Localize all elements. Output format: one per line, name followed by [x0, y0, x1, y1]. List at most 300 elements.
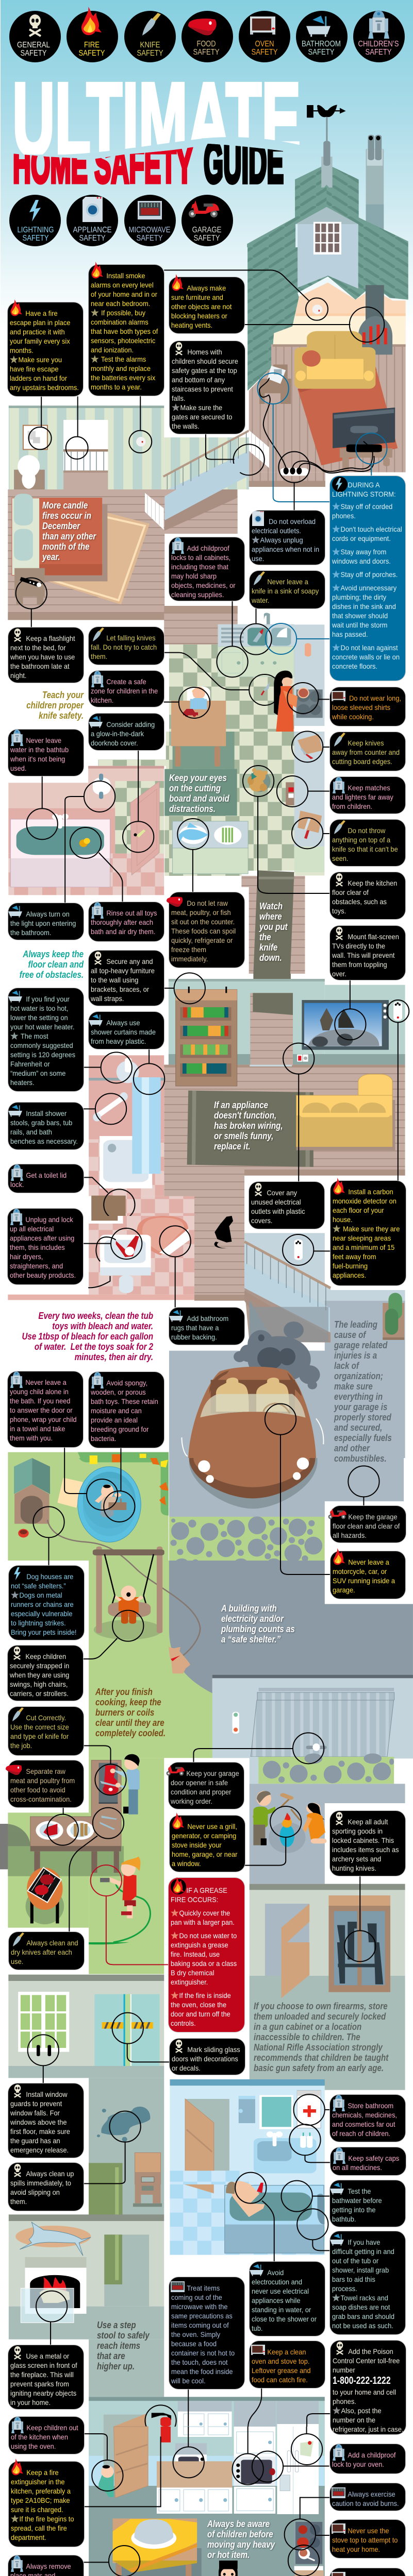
callout: Keep all adult sporting goods: Keep all adult: [348, 1818, 388, 1826]
illustration: girl with hose: [100, 1856, 150, 1942]
callout: Use a metal or glass screen: igniting nearby objects: [10, 2389, 76, 2397]
illustration: sink counter: [218, 613, 294, 676]
callout: Store bathroom chemicals: of reach of children.: [332, 2129, 390, 2138]
callout: Have a fire escape plan: [8, 302, 83, 396]
illustration: fireplace: [21, 2257, 87, 2323]
callout: Mark sliding glass doors: or decals.: [172, 2064, 201, 2072]
caption: Keep your eyes: Keep your eyes: [169, 773, 227, 783]
callout circles: [36, 2173, 328, 2436]
callout: Mark sliding glass doors: [170, 2039, 245, 2075]
caption: Use a step stool: Use a step: [97, 2320, 136, 2330]
caption: If an appliance: If an appliance: [214, 1100, 268, 1110]
illustration: door and child: [98, 2427, 148, 2498]
callout: Use a metal or glass screen: the fireplace. This will: [10, 2370, 74, 2379]
connectors: [48, 1458, 364, 1659]
caption: A building with electricity: A building with: [221, 1603, 277, 1614]
callout: Do not wear long: Do not wear long,: [349, 694, 401, 702]
callout: Add a childproof lock to oven: Add a childproof: [348, 2451, 395, 2459]
callout: Treat items from the microwave: the touch, does not: [171, 2358, 228, 2366]
callout: Install window guards: window falls. For: [10, 2109, 60, 2117]
callout: Add a childproof lock to oven: [330, 2444, 405, 2473]
panel: during a lightning storm: [330, 476, 405, 681]
callout: Cover unused outlets: Cover any: [267, 1189, 297, 1197]
callout: Add bathroom rugs: Add bathroom: [187, 1314, 228, 1323]
callout: Do not throw: [330, 820, 405, 866]
illustration: refrigerator: [277, 2427, 319, 2514]
callout: Keep a fire extinguisher: department.: [11, 2533, 46, 2541]
callout: Install window guards: first floor, make sure: [10, 2127, 70, 2136]
callout: Test the bathwater: bathwater before: [332, 2196, 382, 2205]
callout: Install smoke alarms: [89, 265, 164, 396]
illustration: rug: [298, 366, 398, 465]
callout: Keep all adult sporting goods: archery sets and: [332, 1855, 381, 1863]
callout: Do not wear long: while cooking.: [332, 713, 374, 721]
connectors: [51, 2196, 331, 2427]
caption: Always be aware of children: moving any heavy: [207, 2539, 275, 2550]
callout circles: [28, 1930, 375, 2155]
callout: Store bathroom chemicals: [330, 2095, 405, 2142]
callout: Get a toilet lid lock: lock.: [10, 1180, 24, 1189]
panel: during a lightning storm: has passed.: [332, 630, 368, 638]
panel: during a lightning storm: phones.: [332, 512, 356, 520]
callout: Keep a clean oven: Leftover grease and: [252, 2366, 311, 2375]
callout: Treat items from the microwave: container is not hot to: [171, 2349, 235, 2357]
callout: Keep a fire extinguisher: Keep a fire: [26, 2468, 59, 2477]
caption: Use a step stool: reach items: [97, 2341, 140, 2351]
callout: Keep a fire extinguisher: type 2A10BC; make: [11, 2496, 70, 2504]
callout: Homes with children: children should secure: [172, 357, 238, 365]
callout: Dog houses: especially vulnerable: [11, 1609, 73, 1618]
callout: Do not let raw meat: Do not let raw: [187, 899, 228, 907]
illustration: dark runner and wood: [241, 870, 305, 974]
illustration: upper yard: [8, 1452, 169, 1458]
callout: Install window guards: guards to prevent: [10, 2099, 62, 2108]
callout: Install a carbon monoxide detector: and a minimum of 15: [333, 1243, 394, 1251]
panel: if a grease fire occurs: If the fire is inside: [179, 1991, 231, 1999]
callout: Rinse out toys: bath and air dry them.: [91, 927, 155, 936]
callout: Keep your garage door opener: working order.: [171, 1797, 212, 1805]
callout: Keep a fire extinguisher: If the fire begins to: [20, 2515, 74, 2523]
caption: More candle fires: December: [42, 521, 80, 531]
callout: Always make sure furniture: other objects are not: [171, 302, 232, 311]
callout: Keep the kitchen floor: obstacles, such as: [332, 897, 387, 906]
callout: Install window guards: the guard has an: [10, 2137, 60, 2145]
badge: lightning safety: SAFETY: [23, 234, 49, 243]
panel: if a grease fire occurs: IF A GREASE: [186, 1886, 227, 1894]
callout: Never use the stove top: stove top to attempt to: [332, 2536, 398, 2544]
caption: The leading cause: properly stored: [334, 1412, 391, 1422]
callout: Treat items from the microwave: coming out of the: [171, 2293, 222, 2301]
callout: Mount flat-screen: them from toppling: [332, 960, 387, 969]
callout: Keep matches: [330, 777, 405, 814]
panel: if a grease fire occurs: [169, 1878, 244, 2032]
callout: Always make sure furniture: Always make: [187, 284, 226, 292]
caption: More candle fires: [42, 500, 97, 564]
callout: Keep children out of the kitchen: of the kitchen when: [11, 2433, 68, 2441]
callout: Keep the kitchen floor: [330, 872, 405, 919]
illustration: plant: [383, 1293, 404, 1340]
illustration: staircase: [244, 1242, 331, 1343]
callout: Install shower stools: [8, 1103, 84, 1149]
illustration: picnic table: [30, 1760, 121, 1873]
badge: oven safety: SAFETY: [252, 48, 278, 57]
callout: If you have difficulty getting in: Towel racks and: [341, 2294, 388, 2302]
illustration: blue bathroom: [170, 2079, 325, 2184]
callout: Always make sure furniture: [169, 277, 244, 333]
callout: If you have difficulty getting in: soap dishes are not: [332, 2303, 390, 2311]
caption: Teach your children: children proper: [26, 700, 84, 710]
callout: Homes with children: gates are secured to: [172, 413, 232, 421]
callout: Always turn on the light: the bathroom.: [10, 928, 51, 937]
illustration: kitchen floor: [169, 645, 294, 732]
caption: If you choose to own firearms: If you choose to own firearms, store: [254, 2001, 388, 2011]
illustration: second bathroom: [89, 1055, 194, 1216]
callout: Do not let raw meat: freeze them: [171, 945, 206, 954]
callout: Create a safe zone: [89, 671, 164, 707]
callout: Test the bathwater: getting into the: [332, 2206, 376, 2214]
callout: Unplug and lock up appliances: Unplug and lock: [25, 1215, 73, 1224]
callout: If you find your hot water: heaters.: [10, 1078, 35, 1087]
callout: If you have difficulty getting in: process.: [332, 2284, 357, 2293]
callout: Add the Poison Control Center number: number on the: [333, 2416, 375, 2424]
callout: Store bathroom chemicals: Store bathroom: [348, 2102, 393, 2110]
callout: Get a toilet lid lock: [8, 1164, 84, 1193]
callout: Store bathroom chemicals: chemicals, medicines,: [332, 2111, 397, 2119]
illustration: right counter: [294, 624, 324, 726]
callout: Install a carbon monoxide detector: house.: [333, 1215, 353, 1224]
caption: If an appliance: replace it.: [214, 1141, 251, 1151]
caption: Watch where you put the knife down: the: [259, 932, 271, 942]
panel: during a lightning storm: plumbing; the dirty: [332, 593, 386, 601]
caption: The leading cause: everything in: [334, 1392, 383, 1402]
callout: Avoid spongy bath toys: Avoid spongy,: [106, 1379, 147, 1387]
panel: if a grease fire occurs: Quickly cover the: [179, 1909, 230, 1917]
callout: Consider adding: doorknob cover.: [91, 739, 138, 747]
callout: Keep matches: and lighters far away: [332, 793, 393, 801]
callout: If you find your hot water: your hot water heater.: [10, 1023, 75, 1031]
illustration: car rear: [189, 1458, 318, 1509]
caption: Watch where you put the knife down: [259, 901, 289, 963]
caption: Always keep the floor clean: free of obstacles.: [20, 970, 84, 980]
callout: Rinse out toys: [89, 902, 164, 941]
callout: Have a fire escape plan: Have a fire: [25, 309, 58, 317]
callout: Always clean and dry knives: [9, 1932, 84, 1970]
caption: Keep your eyes: on the cutting: [169, 783, 221, 793]
callout: Unplug and lock up appliances: straighteners, and: [10, 1262, 63, 1270]
caption: After you finish cooking: cooking, keep the: [95, 1697, 161, 1707]
callout: Cover unused outlets: [249, 1182, 324, 1229]
callout: Always use shower curtains: [89, 1012, 164, 1049]
callout: Dog houses: Bring your pets inside!: [11, 1628, 76, 1636]
panel: during a lightning storm: windows and doors.: [332, 557, 391, 565]
callout: Keep a fire extinguisher: kitchen, preferably a: [11, 2487, 71, 2495]
callout: Avoid spongy bath toys: moisture and can: [91, 1406, 142, 1415]
callout: Keep your garage door opener: condition and proper: [171, 1788, 231, 1796]
callout circles: [33, 1466, 379, 1641]
callout: Get a toilet lid lock: Get a toilet lid: [26, 1171, 67, 1179]
scene: bedroom and kitchen: [8, 464, 330, 732]
panel: during a lightning storm: LIGHTNING STORM:: [332, 490, 396, 498]
callout: Use a metal or glass screen: in your home.: [10, 2398, 51, 2406]
illustration: nightstand and flashlight: [14, 568, 45, 604]
illustration: dish counter: [173, 821, 248, 874]
panel: if a grease fire occurs: the oven, close the: [171, 2001, 226, 2009]
callout: Never leave water: water in the bathtub: [10, 745, 69, 754]
callout: Keep a flashlight: Keep a flashlight: [26, 634, 75, 642]
callout: Keep children out of the kitchen: [9, 2417, 84, 2454]
callout: If you find your hot water: If you find your: [26, 995, 70, 1003]
title: Ultimate Home Safety Guide: HOME SAFETY: [13, 136, 193, 194]
illustration: dog: [169, 1647, 190, 1673]
badge: oven safety: [239, 11, 290, 62]
caption: After you finish cooking: burners or coils: [95, 1707, 154, 1718]
callout: Always exercise caution: [330, 2483, 405, 2511]
callout: Treat items from the microwave: items coming out of: [171, 2321, 229, 2329]
callout: Have a fire escape plan: ladders on hand for: [10, 374, 67, 382]
badge: lightning safety: [9, 195, 61, 246]
illustration: stairs: [163, 431, 249, 491]
callout: Dog houses: not “safe shelters.”: [11, 1582, 66, 1590]
caption: The leading cause: injuries is a: [334, 1350, 377, 1361]
panel: if a grease fire occurs: door and turn off the: [171, 2010, 230, 2018]
caption: Teach your children: Teach your: [42, 690, 84, 700]
callout: Never leave a motorcycle running: motorcycle, car, or: [333, 1567, 387, 1575]
callout: Install a carbon monoxide detector: monoxide detector on: [333, 1197, 397, 1205]
illustration: black cat: [214, 1216, 233, 1248]
caption: The leading cause: organization;: [334, 1371, 383, 1381]
callout: Keep a fire extinguisher: sure it is charged.: [11, 2505, 63, 2514]
callout: Never leave a young child: phone, wrap your child: [10, 1415, 77, 1423]
illustration: doorway: [250, 993, 293, 1066]
callout: If you find your hot water: Fahrenheit or: [10, 1060, 50, 1068]
callout: Homes with children: the walls.: [172, 422, 200, 430]
illustration: child at table: [171, 687, 226, 732]
illustration: kitchen upper wall: [89, 2397, 325, 2427]
callout: Keep a fire extinguisher: [9, 2462, 84, 2547]
callout: Install smoke alarms: alarms on every level: [91, 281, 154, 289]
illustration: towel: [57, 1478, 83, 1508]
callout: Use a metal or glass screen: prevent sparks from: [10, 2380, 69, 2388]
illustration: sliding glass door: [94, 1994, 160, 2066]
callout: Treat items from the microwave: because a food: [171, 2340, 217, 2348]
caption: If an appliance: doesn't function,: [214, 1110, 276, 1121]
callout: Keep a flashlight: [8, 628, 84, 683]
badge: food safety: SAFETY: [193, 48, 220, 57]
callout: Always use shower curtains: Always use: [106, 1019, 140, 1027]
callout: Secure any furniture: wall straps.: [91, 994, 124, 1003]
callout: Add childproof locks: objects, medicines, or: [171, 581, 236, 589]
callout: Avoid electrocution: close to the shower or: [252, 2315, 317, 2323]
callout: Secure any furniture: all top-heavy furniture: [91, 967, 155, 975]
callout: Always turn on the light: [8, 903, 84, 940]
callout: Let falling knives: fall. Do not try to catch: [91, 643, 157, 651]
callout: Add childproof locks: cleaning supplies.: [171, 590, 224, 599]
callout: Consider adding: Consider adding: [106, 720, 155, 728]
callout: Install a carbon monoxide detector: appliances.: [333, 1271, 366, 1279]
illustration: sofa: [294, 331, 375, 389]
callout: Cut Correctly: Use the correct size: [10, 1723, 69, 1731]
callout: Test the bathwater: [330, 2180, 405, 2227]
callout: Mount flat-screen: TVs directly to the: [332, 942, 385, 950]
callout: If you have difficulty getting in: out of the tub or: [332, 2257, 378, 2265]
illustration: house lower wall: [8, 1975, 164, 2184]
callout: Never leave a knife: [250, 571, 325, 608]
badge: microwave safety: [124, 195, 176, 246]
callout: Keep the kitchen floor: Keep the kitchen: [348, 879, 397, 887]
callout: Keep matches: Keep matches: [348, 784, 390, 792]
callout: Always clean and dry knives: use.: [11, 1957, 23, 1965]
callout circles: [29, 298, 387, 483]
callout: Separate raw meat: meat and poultry from: [10, 1776, 75, 1785]
callout: Do not overload: electrical outlets.: [252, 527, 301, 535]
callout: Do not wear long: loose sleeved shirts: [332, 703, 390, 711]
callout: Use a metal or glass screen: glass screen in front of: [10, 2361, 77, 2369]
illustration: girl: [214, 2561, 240, 2576]
callout: Never leave a young child: [8, 1371, 83, 1447]
caption: The leading cause: [334, 1319, 392, 1464]
connectors: [41, 270, 371, 489]
callout: If you have difficulty getting in: grab bars and should: [332, 2312, 394, 2320]
caption: Every two weeks: Use 1tbsp of bleach for each gallon: [22, 1331, 153, 1342]
caption: The leading cause: garage related: [334, 1340, 387, 1350]
panel: during a lightning storm: cords or equipment.: [332, 534, 391, 543]
illustration: smoke detector: [294, 1240, 303, 1260]
badge: general safety: GENERAL: [17, 41, 50, 49]
callout: Add childproof locks: [169, 537, 244, 601]
caption: The leading cause: your garage is: [334, 1402, 387, 1412]
callout: Avoid electrocution: tub.: [252, 2324, 262, 2332]
callout: Keep a flashlight: next to the bed, for: [10, 643, 65, 652]
caption: Every two weeks: [22, 1311, 153, 1362]
illustration: stairs lower: [145, 464, 249, 531]
callout: Have a fire escape plan: and practice it with: [10, 328, 65, 336]
panel: if a grease fire occurs: baking soda or a class: [171, 1959, 237, 1968]
panel: if a grease fire occurs: FIRE OCCURS:: [171, 1895, 218, 1904]
caption: Always keep the floor clean: [20, 949, 84, 980]
illustration: power strip and cords: [259, 378, 374, 476]
callout: Cut Correctly: Cut Correctly.: [26, 1714, 66, 1722]
caption: A building with electricity: plumbing counts as: [221, 1624, 295, 1634]
illustration: phone on table: [259, 364, 291, 404]
caption: Use a step stool: [97, 2320, 150, 2371]
illustration: teddy bear: [247, 768, 271, 792]
callout: Install smoke alarms: of your home and in or: [91, 290, 157, 298]
callout: Treat items from the microwave: Treat items: [187, 2284, 220, 2292]
illustration: patio: [250, 1784, 405, 1884]
callout: Let falling knives: Let falling knives: [106, 634, 156, 642]
callout: Treat items from the microwave: the oven. Simply: [171, 2330, 220, 2338]
callout: If you find your hot water: commonly suggested: [10, 1041, 73, 1049]
scene: kitchen lower and night-light bathroom: [84, 2427, 406, 2576]
callout: Keep the kitchen floor: floor clear of: [332, 888, 369, 896]
callout: Avoid spongy bath toys: bath toys. These retain: [91, 1397, 158, 1405]
callout: Add childproof locks: including those that: [171, 563, 228, 571]
badge: appliance safety: SAFETY: [79, 234, 106, 243]
callout: Add the Poison Control Center number: Also, post the: [341, 2406, 382, 2415]
callout: Install a carbon monoxide detector: [331, 1181, 406, 1285]
callout: Install smoke alarms: that have both types of: [91, 327, 158, 335]
caption: If you choose to own firearms: recommends that children be taught: [254, 2053, 388, 2063]
caption: If you choose to own firearms: [254, 2001, 389, 2073]
illustration: baby gate: [249, 430, 269, 468]
callout: If you find your hot water: [8, 988, 84, 1091]
callout: Test the bathwater: bathtub.: [332, 2215, 356, 2223]
caption: If an appliance: or smells funny,: [214, 1131, 273, 1141]
scene: garage door, barbecue and campfire: [0, 1700, 413, 1942]
callout: Keep a flashlight: when you have to use: [10, 653, 75, 661]
callout: Do not overload: appliances when not in: [252, 545, 319, 553]
caption: Teach your children: [26, 690, 84, 721]
callout: Keep children out of the kitchen: using the oven.: [11, 2442, 56, 2450]
callout: Keep a flashlight: night.: [10, 671, 27, 680]
callout: Avoid spongy bath toys: [89, 1372, 164, 1448]
callout: Never use the stove top: heat your home.: [332, 2545, 380, 2553]
callout: Avoid electrocution: [250, 2262, 325, 2336]
callout: Dog houses: Dogs on metal: [20, 1591, 62, 1599]
callout: Mount flat-screen: over.: [332, 970, 346, 978]
callout: Have a fire escape plan: any upstairs bedrooms.: [10, 383, 79, 392]
illustration: driveway: [169, 1561, 413, 1693]
callout: Always exercise caution: Always exercise: [348, 2490, 395, 2498]
panel: during a lightning storm: Stay off of porches.: [341, 570, 398, 579]
caption: Use a step stool: stool to safely: [97, 2330, 150, 2341]
illustration: dining table: [113, 2518, 202, 2576]
callout: Do not wear long: [330, 687, 405, 726]
illustration: living wall with marlin: [9, 2214, 164, 2397]
callout circles: [95, 973, 409, 1220]
panel: if a grease fire occurs: extinguish a grease: [171, 1941, 228, 1949]
badge: appliance safety: APPLIANCE: [73, 226, 111, 234]
illustration: bush: [0, 1824, 47, 1874]
callout: Never leave a young child: Never leave a: [25, 1378, 67, 1386]
panel: during a lightning storm: concrete floors.: [332, 662, 377, 670]
title: Ultimate Home Safety Guide: GUIDE: [204, 132, 284, 195]
caption: More candle fires: fires occur in: [42, 511, 91, 521]
panel: during a lightning storm: Don't touch electrical: [341, 525, 402, 533]
caption: Every two weeks: minutes, then air dry.: [75, 1352, 153, 1362]
illustration: children at campfire: [253, 1791, 326, 1847]
callout: Mount flat-screen: Mount flat-screen: [348, 933, 399, 941]
callout: Always clean up spills: Always clean up: [26, 2170, 74, 2178]
illustration: wading pool with child: [78, 1467, 141, 1542]
callout: Never leave a motorcycle running: garage.: [333, 1586, 355, 1594]
callout: Avoid electrocution: appliances while: [252, 2296, 301, 2304]
callout: Install a carbon monoxide detector: Make sure they are: [343, 1225, 400, 1233]
callout: Unplug and lock up appliances: them, this includes: [10, 1243, 65, 1251]
callout: Install shower stools: benches as necessary.: [10, 1137, 78, 1145]
callout: Never leave water: when it's not being: [10, 755, 65, 763]
illustration: dog house: [14, 1458, 50, 1524]
callout: Do not let raw meat: sit out on the counter.: [171, 918, 235, 926]
callout: Keep safety caps: Keep safety caps: [348, 2154, 399, 2162]
callout: Treat items from the microwave: microwave with the: [171, 2302, 228, 2311]
callout: If you have difficulty getting in: bars to aid this: [332, 2275, 375, 2283]
callout: Dog houses: to lightning strikes.: [11, 1619, 66, 1627]
callout: Homes with children: and bottom of any: [172, 376, 225, 384]
callout: Install smoke alarms: Test the alarms: [101, 355, 146, 363]
callout: Use a metal or glass screen: Use a metal or: [26, 2352, 69, 2360]
illustration: woman cooking: [274, 671, 309, 732]
illustration: round bath mat: [137, 1216, 190, 1256]
callout: Create a safe zone: zone for children in the: [91, 687, 158, 695]
callout: Keep a fire extinguisher: extinguisher in the: [11, 2478, 65, 2486]
caption: More candle fires: month of the: [42, 541, 90, 552]
panel: table shadow and caption ground: [164, 732, 237, 816]
callout: Homes with children: [170, 341, 245, 434]
callout: Keep knives away: Keep knives: [348, 739, 384, 747]
callout: Keep children securely strapped: Keep children: [25, 1652, 66, 1660]
caption: More candle fires: year.: [42, 552, 60, 562]
